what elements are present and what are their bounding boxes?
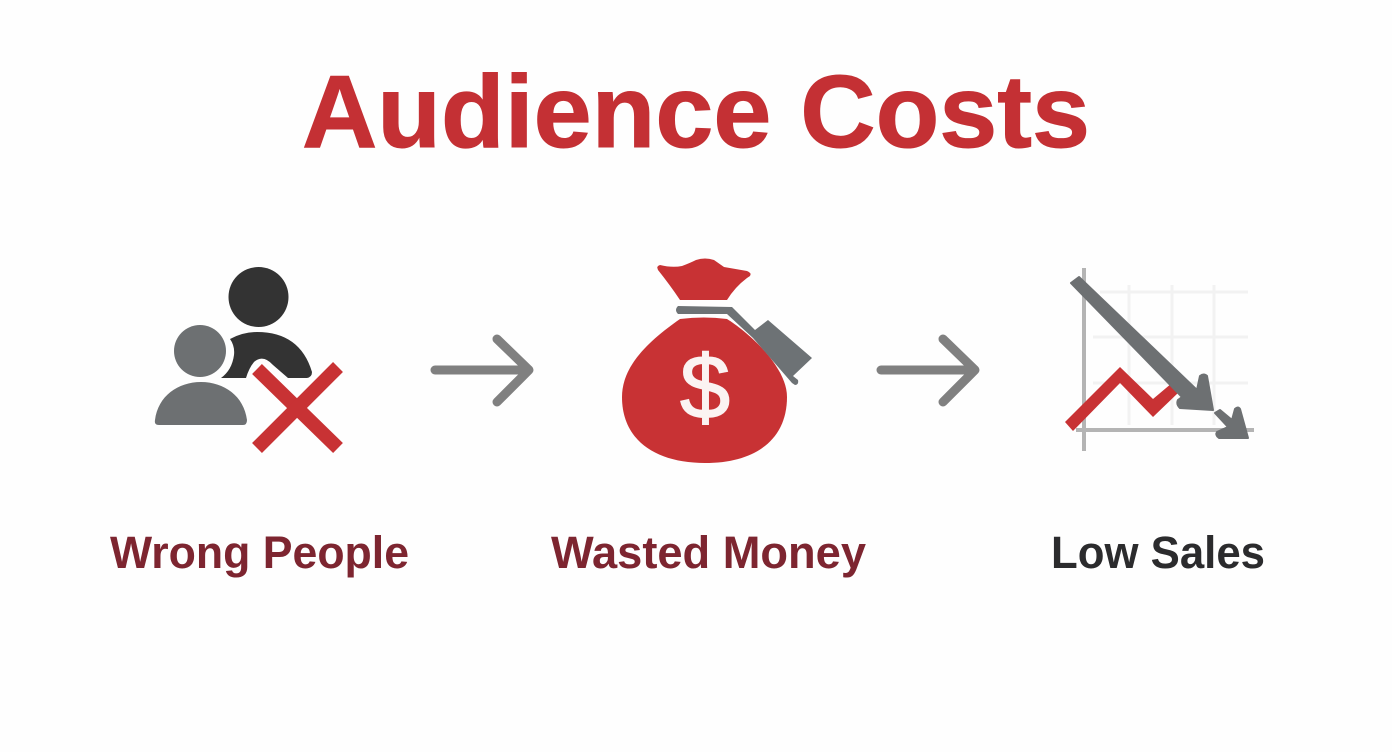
label: low sales: Low Sales — [1051, 527, 1265, 578]
arrow 2 — [881, 339, 975, 402]
large grey arrow — [1071, 277, 1213, 410]
small grey arrow — [1215, 408, 1248, 438]
icon: money bag — [622, 258, 812, 463]
red sales line — [1065, 367, 1179, 431]
bag body — [622, 318, 787, 463]
title: Audience Costs — [302, 54, 1090, 169]
bag tie and tag — [676, 306, 812, 385]
dollar sign: $ — [680, 338, 730, 438]
icon: falling sales chart — [1065, 268, 1254, 451]
chart grid — [1093, 285, 1248, 425]
label: wasted money: Wasted Money — [551, 527, 866, 578]
icon: wrong people — [155, 267, 338, 448]
arrow 1 — [435, 339, 529, 402]
chart axes — [1076, 268, 1254, 451]
dark person — [221, 267, 312, 378]
label: wrong people: Wrong People — [110, 527, 409, 578]
red cross — [257, 367, 338, 448]
bag knot — [657, 258, 751, 300]
grey person — [155, 325, 247, 425]
